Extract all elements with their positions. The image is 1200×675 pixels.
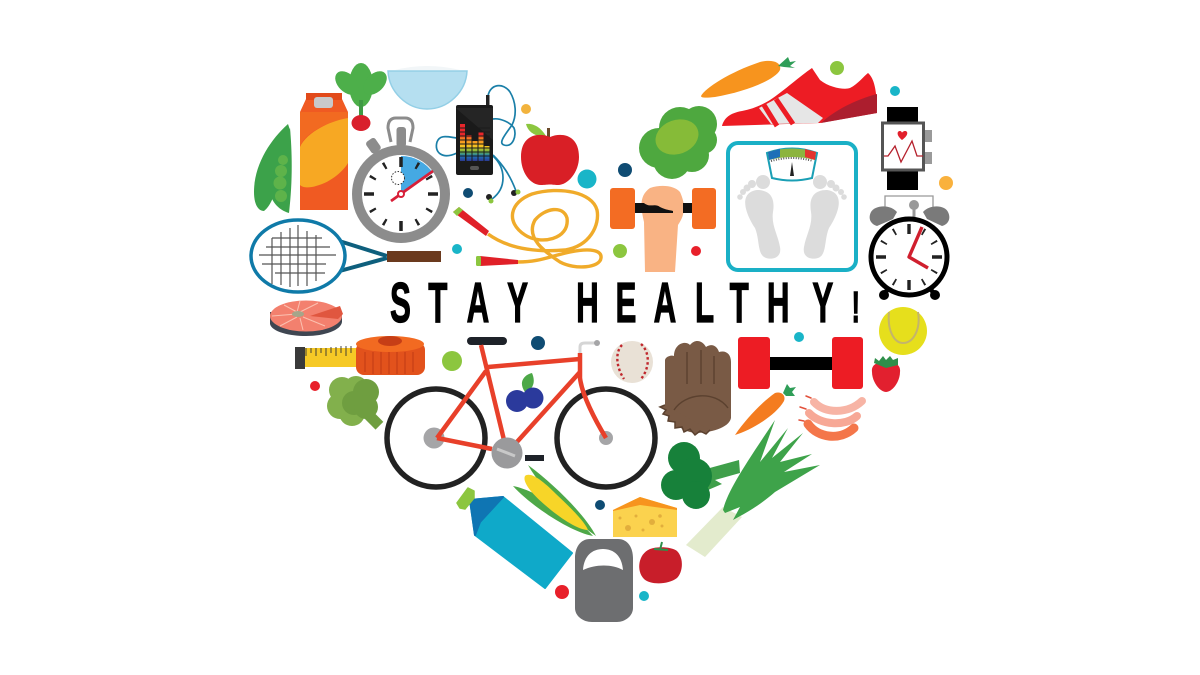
icon: bicycle xyxy=(387,337,655,487)
icon: red sneaker xyxy=(722,68,877,126)
icon: cheese xyxy=(613,497,677,537)
icon: artichoke xyxy=(327,376,383,430)
icon: small carrot xyxy=(735,384,796,435)
icon: baseball glove xyxy=(660,341,731,435)
icon: carrot top xyxy=(701,57,796,98)
icon: pea pod xyxy=(254,124,292,213)
icon: radish xyxy=(331,63,391,131)
icon: red dumbbell xyxy=(738,337,863,389)
icon: tape measure xyxy=(295,336,425,375)
icon: baseball xyxy=(611,341,653,383)
icon: blueberries xyxy=(506,373,544,412)
icon: bathroom scale xyxy=(728,143,856,270)
icon: tennis racket xyxy=(251,220,441,292)
icon: raspberry xyxy=(872,356,900,392)
icon: orange dumbbell in fist xyxy=(610,186,716,272)
icon: tennis ball xyxy=(879,307,927,355)
icon: water bottle xyxy=(457,488,572,588)
icon: shrimp xyxy=(799,396,862,436)
icon: juice carton xyxy=(300,93,348,210)
title: STAY HEALTHY ! xyxy=(390,270,860,334)
icon: leek xyxy=(686,420,820,557)
icon: jump rope xyxy=(453,191,601,267)
icon: phone with earphones xyxy=(436,86,520,204)
icon: corn xyxy=(513,465,596,536)
icon: alarm clock xyxy=(870,196,949,300)
icon: tomato xyxy=(639,542,682,583)
icon: salmon steak xyxy=(270,300,343,336)
icon: kettlebell xyxy=(575,539,633,622)
icon: stopwatch xyxy=(352,118,450,243)
icon: apple xyxy=(521,124,579,185)
icon: broccoli xyxy=(661,442,740,509)
icon: bowl xyxy=(388,66,467,109)
icon: lettuce xyxy=(639,106,717,179)
icon: smart watch xyxy=(882,107,932,190)
decorative dots xyxy=(310,61,953,601)
